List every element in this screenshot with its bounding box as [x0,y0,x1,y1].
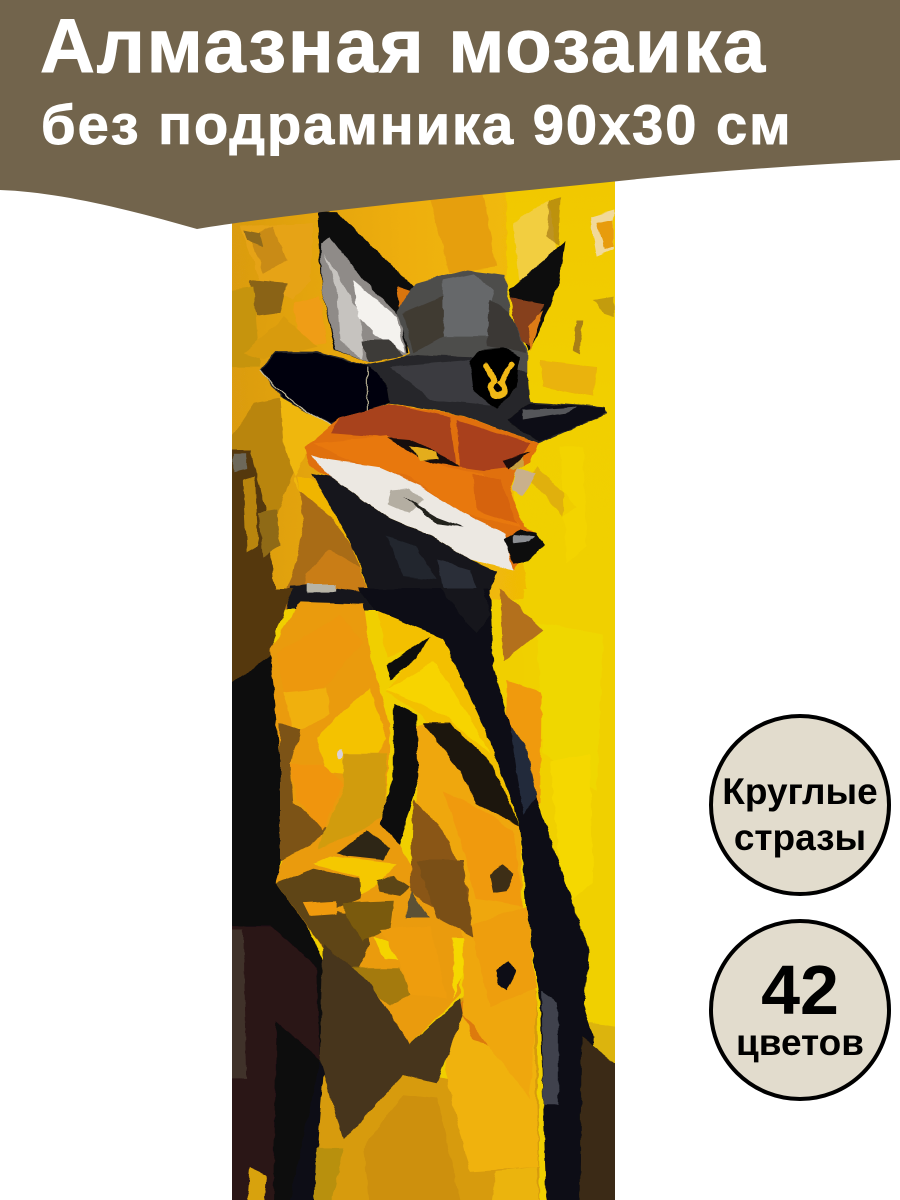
black scarf [312,473,497,610]
coat skirt [313,991,540,1200]
hat badge [470,348,520,410]
badge: 42 colours [709,919,891,1101]
badge: round rhinestones [709,714,891,896]
coat sleeve [270,602,463,1044]
badge: 42 colours: цветов [736,1022,864,1063]
white muzzle [312,455,513,571]
subtitle: без подрамника 90х30 см [41,93,793,156]
hat brim [260,352,607,443]
ear left [317,212,420,363]
fox eyes [387,438,460,467]
ear right [508,242,565,352]
black tie and scarf [357,589,593,1200]
hand and pocket [276,868,370,968]
dark left background [232,588,294,682]
header banner [0,0,900,229]
black lapel shadow [423,723,520,826]
top half in zoom-1 coordinates [220,180,630,610]
coat collar [378,611,516,816]
painting: fox in yellow trench coat [232,181,615,1200]
hat crown [396,270,528,376]
title: Алмазная мозаика [40,4,767,89]
dark left strip [232,450,276,590]
background strokes [505,187,615,590]
badge: round rhinestones: стразы [734,817,866,858]
coat front [417,715,537,1098]
bottom half in zoom-2 coordinates [220,589,630,1200]
badge: round rhinestones: Круглые [722,771,878,812]
shoulder and lapel [284,492,373,610]
coat buttons [490,864,513,893]
fox face [305,404,538,570]
badge: 42 colours: 42 [761,951,839,1029]
fox nose [503,530,545,563]
